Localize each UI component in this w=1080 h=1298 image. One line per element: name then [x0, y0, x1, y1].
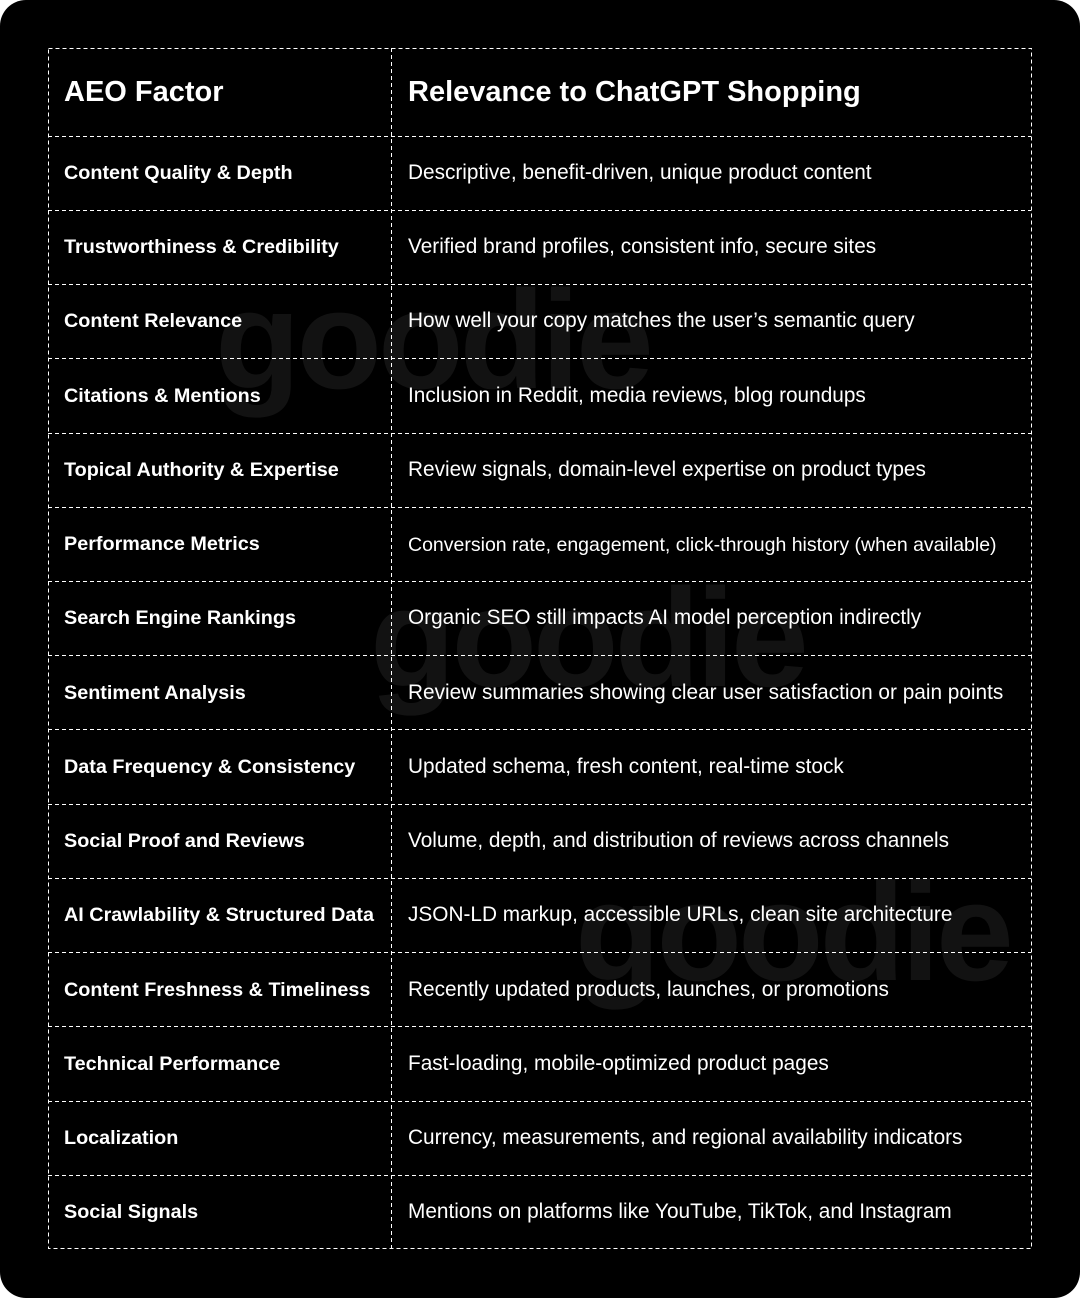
- row 10: Social Proof and Reviews: [64, 830, 305, 852]
- row 1 desc: Descriptive, benefit-driven, unique product content: [408, 161, 872, 184]
- row 1: Content Quality & Depth: [64, 162, 293, 184]
- row 5: Topical Authority & Expertise: [64, 459, 339, 481]
- row 10 desc: Volume, depth, and distribution of reviews across channels: [408, 829, 949, 852]
- row 13: Technical Performance: [64, 1053, 280, 1075]
- row 6: Performance Metrics: [64, 533, 260, 555]
- row 7: Search Engine Rankings: [64, 607, 296, 629]
- watermark: goodie 1: goodie: [215, 261, 650, 418]
- row 15 desc: Mentions on platforms like YouTube, TikTok, and Instagram: [408, 1200, 952, 1223]
- watermark: goodie 2: goodie: [370, 559, 805, 716]
- row 6 desc: Conversion rate, engagement, click-through history (when available): [408, 534, 997, 556]
- row 2 desc: Verified brand profiles, consistent info, secure sites: [408, 235, 876, 258]
- row 8: Sentiment Analysis: [64, 682, 246, 704]
- row 4 desc: Inclusion in Reddit, media reviews, blog roundups: [408, 384, 866, 407]
- row 9 desc: Updated schema, fresh content, real-time stock: [408, 755, 844, 778]
- row 11 desc: JSON-LD markup, accessible URLs, clean site architecture: [408, 903, 952, 926]
- row 12: Content Freshness & Timeliness: [64, 979, 370, 1001]
- row 12 desc: Recently updated products, launches, or promotions: [408, 978, 889, 1001]
- row 3 desc: How well your copy matches the user’s semantic query: [408, 309, 915, 332]
- row 3: Content Relevance: [64, 310, 242, 332]
- row 13 desc: Fast-loading, mobile-optimized product pages: [408, 1052, 829, 1075]
- watermark: goodie 3: goodie: [575, 853, 1010, 1010]
- row 9: Data Frequency & Consistency: [64, 756, 355, 778]
- row 14 desc: Currency, measurements, and regional availability indicators: [408, 1126, 962, 1149]
- row 2: Trustworthiness & Credibility: [64, 236, 339, 258]
- row 14: Localization: [64, 1127, 178, 1149]
- row 7 desc: Organic SEO still impacts AI model perception indirectly: [408, 606, 921, 629]
- row 5 desc: Review signals, domain-level expertise on product types: [408, 458, 926, 481]
- row 8 desc: Review summaries showing clear user satisfaction or pain points: [408, 681, 1003, 704]
- row 11: AI Crawlability & Structured Data: [64, 904, 374, 926]
- row 15: Social Signals: [64, 1201, 198, 1223]
- row 4: Citations & Mentions: [64, 385, 261, 407]
- header: AEO Factor: AEO Factor: [64, 76, 224, 108]
- header: Relevance: Relevance to ChatGPT Shopping: [408, 76, 861, 108]
